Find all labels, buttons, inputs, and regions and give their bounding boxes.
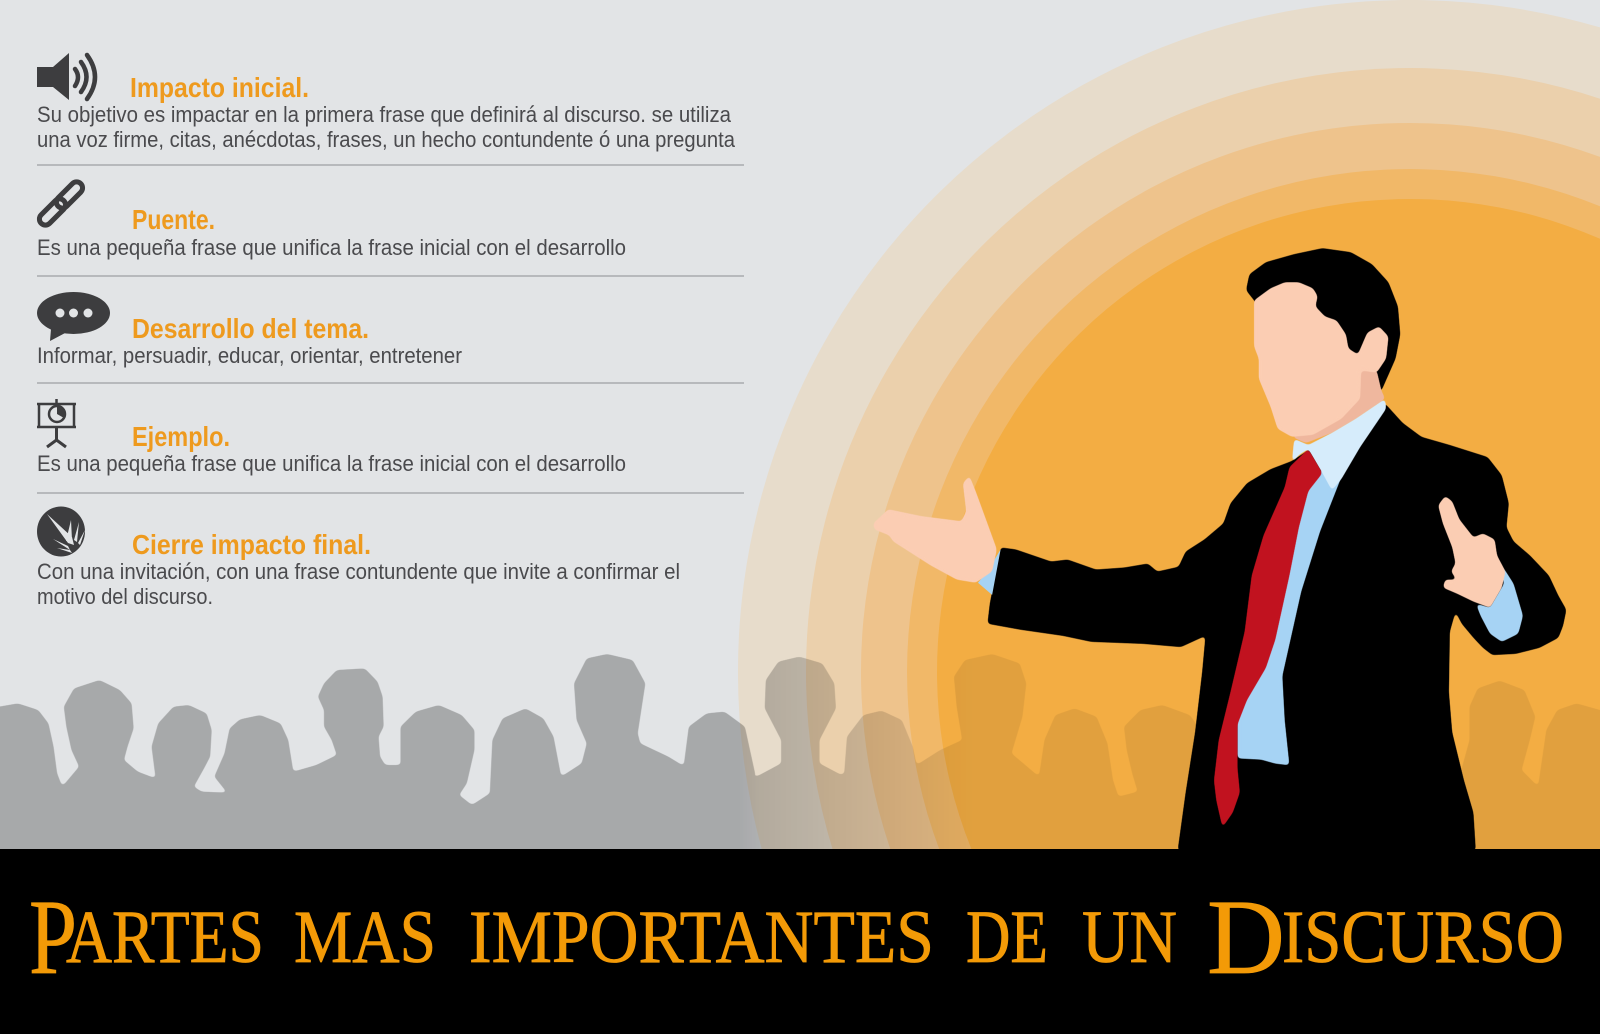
title xyxy=(29,879,1564,997)
face and ear xyxy=(1254,282,1389,437)
title: MAS xyxy=(294,896,436,979)
text: cierre impacto final: motivo del discurso. xyxy=(37,584,213,609)
left open hand xyxy=(873,476,997,583)
title: DE xyxy=(966,896,1048,979)
right hand xyxy=(1438,496,1506,608)
section: puente xyxy=(37,179,626,260)
title: D xyxy=(1207,879,1285,997)
suit jacket xyxy=(987,404,1566,851)
text: impacto inicial: Su objetivo es impactar en la primera frase que definirá al discurso. se utiliza xyxy=(37,102,732,127)
icon: presentation easel xyxy=(37,399,76,447)
text: cierre impacto final: Con una invitación, con una frase contundente que invite a confirmar el xyxy=(37,559,680,584)
icon: speech bubble xyxy=(37,292,110,341)
shirt xyxy=(1238,471,1344,765)
right cuff xyxy=(1476,561,1523,642)
collar xyxy=(1292,399,1386,490)
heading: ejemplo: Ejemplo. xyxy=(132,421,230,452)
text: puente: Es una pequeña frase que unifica la frase inicial con el desarrollo xyxy=(37,235,626,260)
left cuff xyxy=(978,549,1001,595)
icon: speaker xyxy=(37,53,95,100)
title band xyxy=(0,849,1600,1034)
hair xyxy=(1246,248,1400,391)
section: ejemplo xyxy=(37,399,626,476)
neck shadow xyxy=(1292,363,1385,443)
heading: impacto inicial: Impacto inicial. xyxy=(130,72,309,103)
section: cierre impacto final xyxy=(37,506,680,609)
heading: puente: Puente. xyxy=(132,204,215,235)
section: impacto inicial xyxy=(37,53,736,152)
audience silhouettes xyxy=(0,654,1600,849)
title: P xyxy=(29,879,77,997)
heading: cierre impacto final: Cierre impacto final. xyxy=(132,529,371,560)
text: impacto inicial: una voz firme, citas, anécdotas, frases, un hecho contundente ó una pregunta xyxy=(37,127,736,152)
speaker figure xyxy=(873,248,1566,851)
text: desarrollo del tema: Informar, persuadir, educar, orientar, entretener xyxy=(37,343,462,368)
heading: desarrollo del tema: Desarrollo del tema. xyxy=(132,313,369,344)
icon: burst circle xyxy=(37,506,85,556)
section: desarrollo del tema xyxy=(37,292,462,368)
concentric orange rings background xyxy=(738,0,1600,849)
tie xyxy=(1214,449,1322,827)
text: ejemplo: Es una pequeña frase que unifica la frase inicial con el desarrollo xyxy=(37,451,626,476)
title: IMPORTANTES xyxy=(469,896,934,979)
icon: chain link xyxy=(37,179,85,228)
title: UN xyxy=(1082,896,1177,979)
text: impacto inicial xyxy=(37,102,736,152)
text: cierre impacto final xyxy=(37,559,680,609)
title: ISCURSO xyxy=(1282,896,1564,979)
title: ARTES xyxy=(66,896,264,979)
